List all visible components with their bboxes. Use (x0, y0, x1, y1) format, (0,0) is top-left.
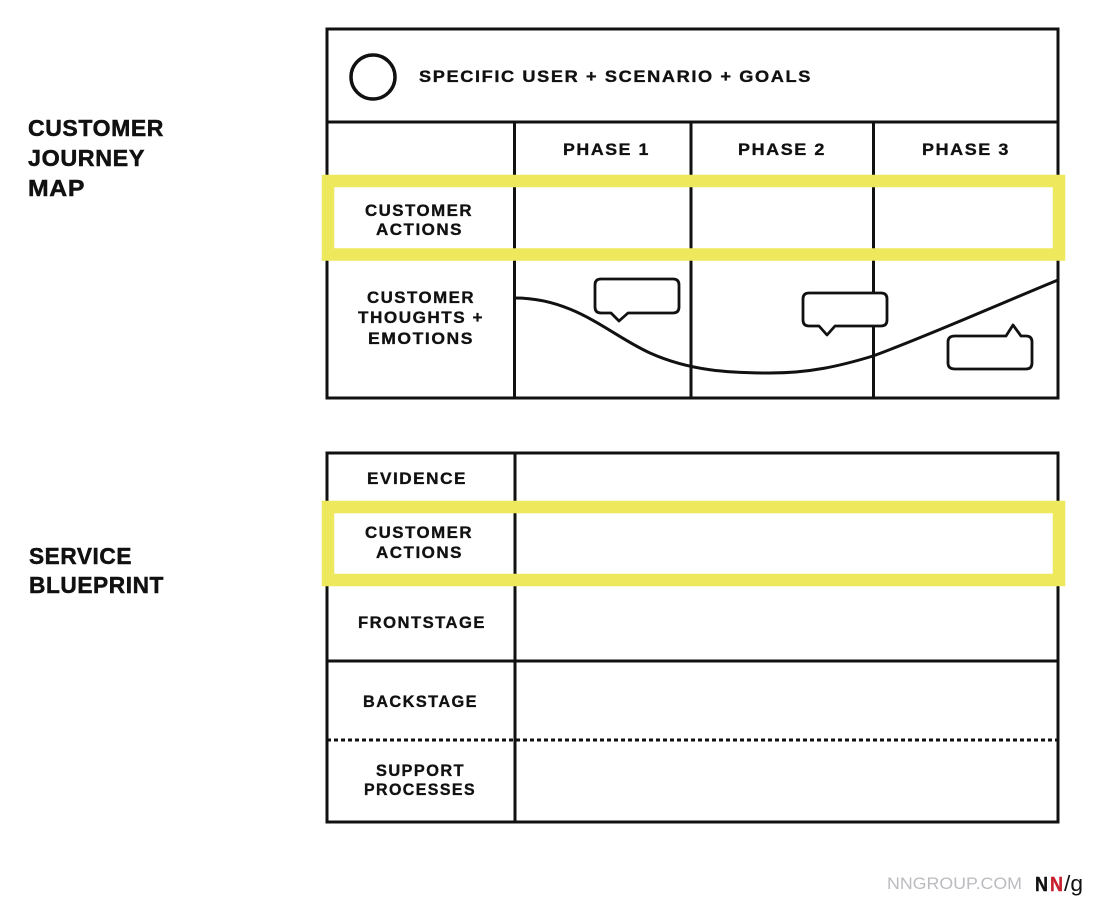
blueprint row labels: CUSTOMER (365, 523, 473, 542)
heading: customer journey map (28, 115, 164, 201)
heading: service blueprint: SERVICE (29, 543, 132, 569)
blueprint row labels: EVIDENCE (367, 469, 467, 488)
footer: nngroup logo: /g (1064, 871, 1083, 896)
panel: service blueprint grid (327, 453, 1058, 822)
heading: service blueprint (29, 543, 164, 598)
row label: customer actions: CUSTOMER (365, 201, 473, 220)
phase headers: PHASE 1 (563, 140, 650, 159)
footer: nngroup logo (887, 871, 1083, 896)
speech bubble 3 (948, 325, 1032, 369)
phase headers: PHASE 2 (738, 140, 826, 159)
phase headers: PHASE 3 (922, 140, 1010, 159)
highlight: journey map customer actions (328, 181, 1059, 254)
row label: customer thoughts and emotions (358, 288, 484, 348)
journey map title row text: SPECIFIC USER + SCENARIO + GOALS (419, 67, 812, 86)
icon: user circle (351, 55, 395, 99)
panel: customer journey map grid (327, 29, 1058, 398)
blueprint row labels: PROCESSES (364, 780, 476, 799)
footer: nngroup logo: N (1035, 874, 1048, 896)
row label: customer actions: ACTIONS (376, 220, 463, 239)
blueprint row labels: SUPPORT (376, 761, 465, 780)
row label: customer actions (365, 201, 473, 239)
heading: service blueprint: BLUEPRINT (29, 572, 164, 598)
row label: customer thoughts and emotions: CUSTOMER (367, 288, 475, 307)
footer: nngroup logo: N (1050, 874, 1063, 896)
row label: customer thoughts and emotions: EMOTIONS (368, 329, 474, 348)
phase headers (563, 140, 1010, 159)
row label: customer thoughts and emotions: THOUGHTS + (358, 308, 484, 327)
blueprint row labels: ACTIONS (376, 543, 463, 562)
heading: customer journey map: MAP (28, 175, 85, 201)
highlight: blueprint customer actions (328, 507, 1059, 580)
heading: customer journey map: JOURNEY (28, 145, 145, 171)
blueprint row labels (358, 469, 486, 799)
blueprint row labels: BACKSTAGE (363, 692, 478, 711)
heading: customer journey map: CUSTOMER (28, 115, 164, 141)
speech bubble 2 (803, 293, 887, 335)
blueprint row labels: FRONTSTAGE (358, 613, 486, 632)
speech bubble 1 (595, 279, 679, 321)
emotion curve (515, 280, 1058, 373)
footer: nngroup logo: NNGROUP.COM (887, 874, 1022, 893)
